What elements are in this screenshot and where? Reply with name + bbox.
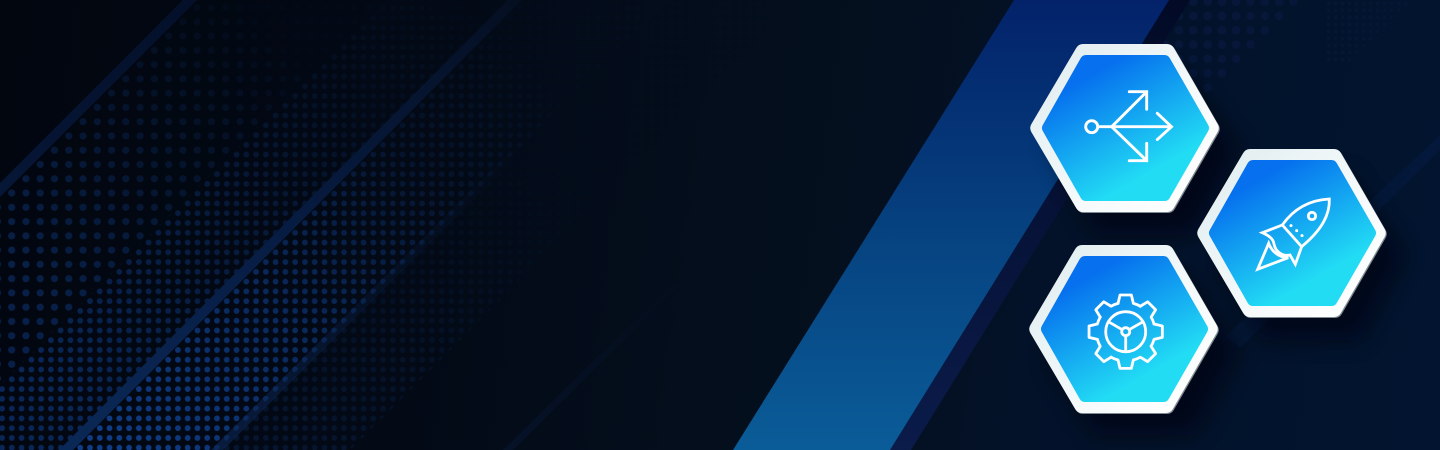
dot pattern: coarse left	[0, 4, 286, 381]
icon: rocket	[1258, 199, 1329, 269]
icon: gear with wheel	[1089, 295, 1162, 368]
hexagon: split arrows	[1038, 52, 1212, 205]
right fine dots	[1325, 0, 1415, 65]
primary blue stripe	[733, 0, 1169, 450]
hexagon: rocket	[1205, 157, 1379, 310]
secondary dark stripe	[890, 0, 1190, 450]
diagonal line: faint	[211, 0, 673, 450]
dot pattern: fine diagonal band	[0, 25, 538, 450]
diagonal line: upper left	[0, 0, 197, 197]
diagonal line: right	[1226, 135, 1440, 348]
diagonal line: main	[59, 0, 522, 450]
right dot pattern	[1160, 0, 1303, 98]
hexagon shadows	[1049, 70, 1405, 435]
icon: split arrows	[1086, 92, 1172, 161]
diagonal line: faint centre	[503, 232, 733, 450]
hexagon: gear	[1037, 253, 1211, 406]
